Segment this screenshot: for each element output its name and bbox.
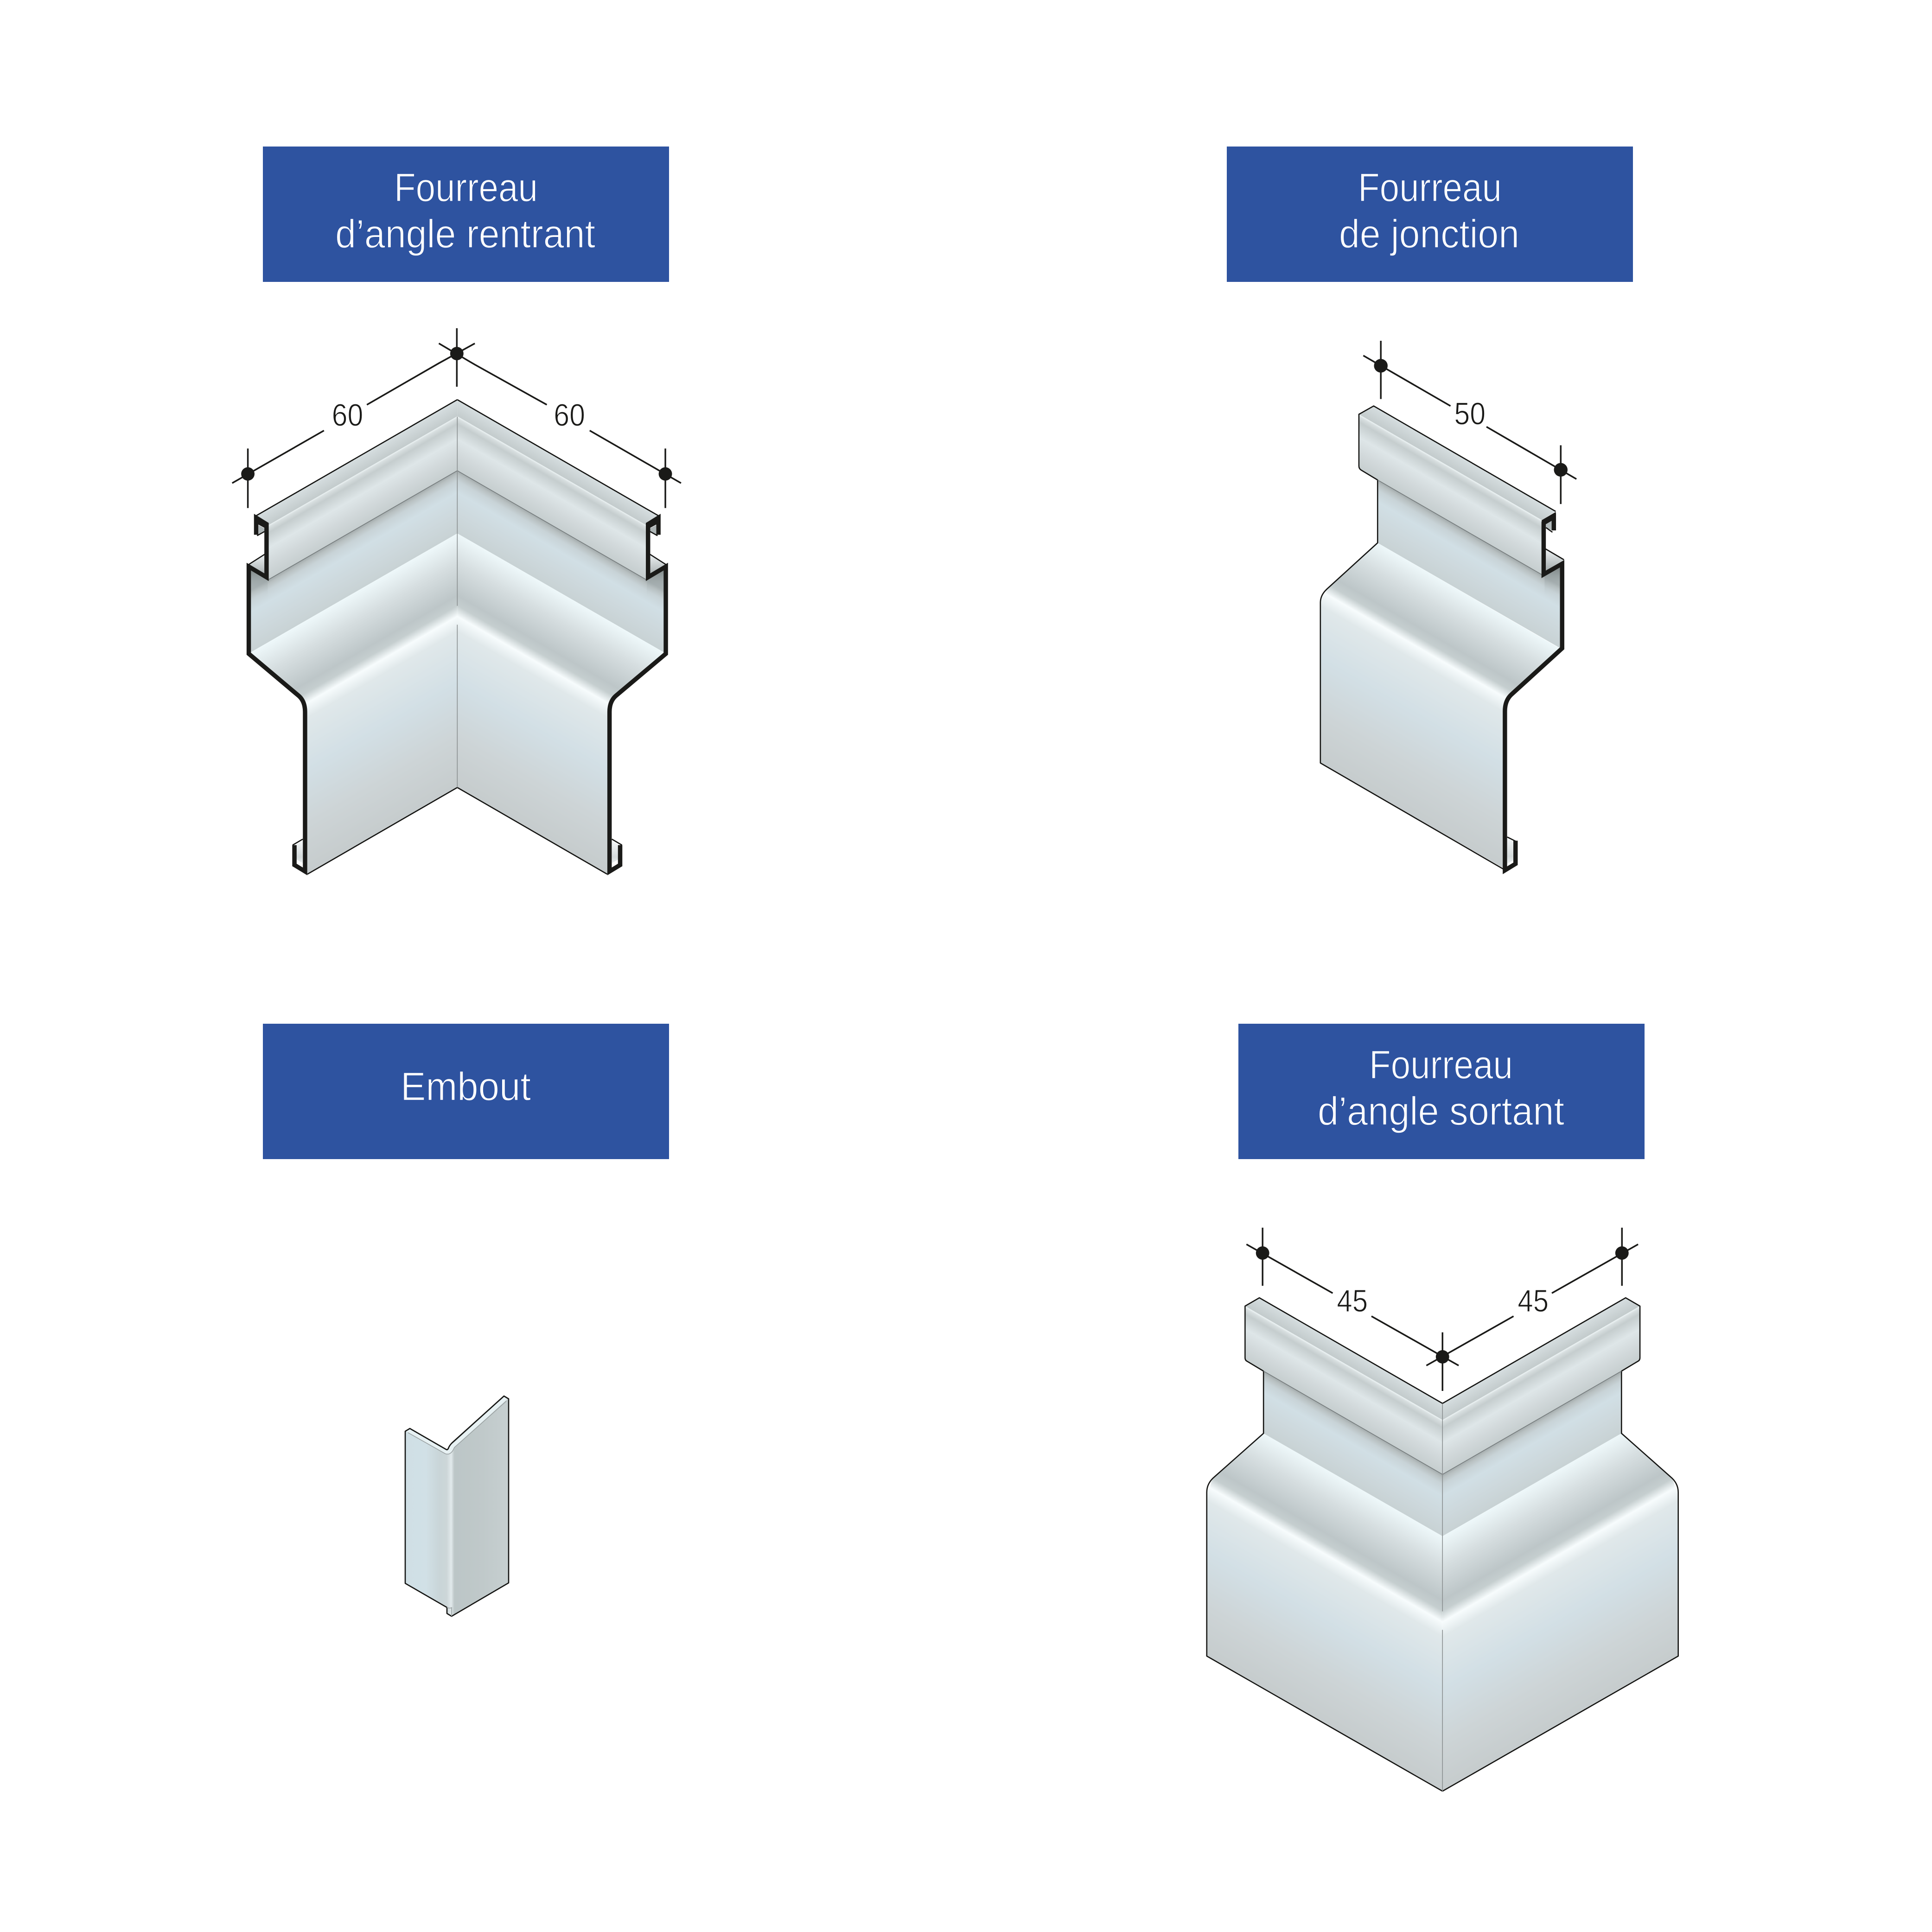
embout body <box>405 1396 509 1616</box>
dimension lines: 45 and 45: 45 <box>1337 1284 1368 1319</box>
dimension line: 50 <box>1363 341 1576 504</box>
title box: Fourreau d'angle sortant <box>1238 1024 1645 1159</box>
diagram: embout <box>405 1396 509 1616</box>
embout top return <box>406 1397 507 1454</box>
left half of sortant profile <box>1207 1298 1442 1791</box>
dimension lines: 60 and 60: 60 <box>554 398 585 433</box>
dimension line: 50: 50 <box>1454 396 1486 432</box>
title box: Fourreau de jonction <box>1227 147 1633 282</box>
dimension lines: 45 and 45: 45 <box>1518 1284 1549 1319</box>
right half of rentrant profile <box>457 400 666 874</box>
diagram: fourreau d'angle rentrant <box>232 328 681 874</box>
title box: Fourreau d'angle rentrant <box>263 147 669 282</box>
outline edges <box>1320 406 1564 869</box>
diagram: fourreau d'angle sortant <box>1207 1228 1678 1791</box>
middle panel <box>1377 477 1562 649</box>
embout outline <box>405 1396 509 1616</box>
centre seam <box>457 417 458 787</box>
sloped panel <box>1325 543 1562 699</box>
dimension lines: 60 and 60: 60 <box>332 398 363 433</box>
title box: Embout <box>263 1024 669 1159</box>
title box: Embout: Embout <box>401 1065 531 1109</box>
centre seam <box>1442 1404 1443 1791</box>
dimension lines: 45 and 45 <box>1246 1228 1638 1391</box>
hook interior <box>1546 520 1552 530</box>
shelf shadow <box>1544 566 1560 598</box>
top lip <box>1359 406 1556 520</box>
title box: Fourreau d'angle rentrant: d’angle rentrant <box>335 212 595 256</box>
dimension lines: 60 and 60 <box>232 328 681 508</box>
foot interior <box>1507 837 1514 864</box>
title box: Fourreau d'angle rentrant: Fourreau <box>394 166 538 210</box>
left half of rentrant profile <box>249 400 457 874</box>
shelf behind rail <box>1546 549 1564 571</box>
title box: Fourreau d'angle sortant: d’angle sortant <box>1318 1089 1564 1134</box>
title box: Fourreau d'angle sortant: Fourreau <box>1369 1043 1513 1087</box>
lower panel <box>1320 593 1508 869</box>
rail face <box>1359 414 1543 576</box>
title box: Fourreau de jonction: Fourreau <box>1358 166 1502 210</box>
diagram: fourreau de jonction <box>1320 341 1576 870</box>
title box: Fourreau de jonction: de jonction <box>1339 212 1519 256</box>
right half of sortant profile <box>1442 1298 1678 1791</box>
black cut profile <box>1505 517 1562 870</box>
